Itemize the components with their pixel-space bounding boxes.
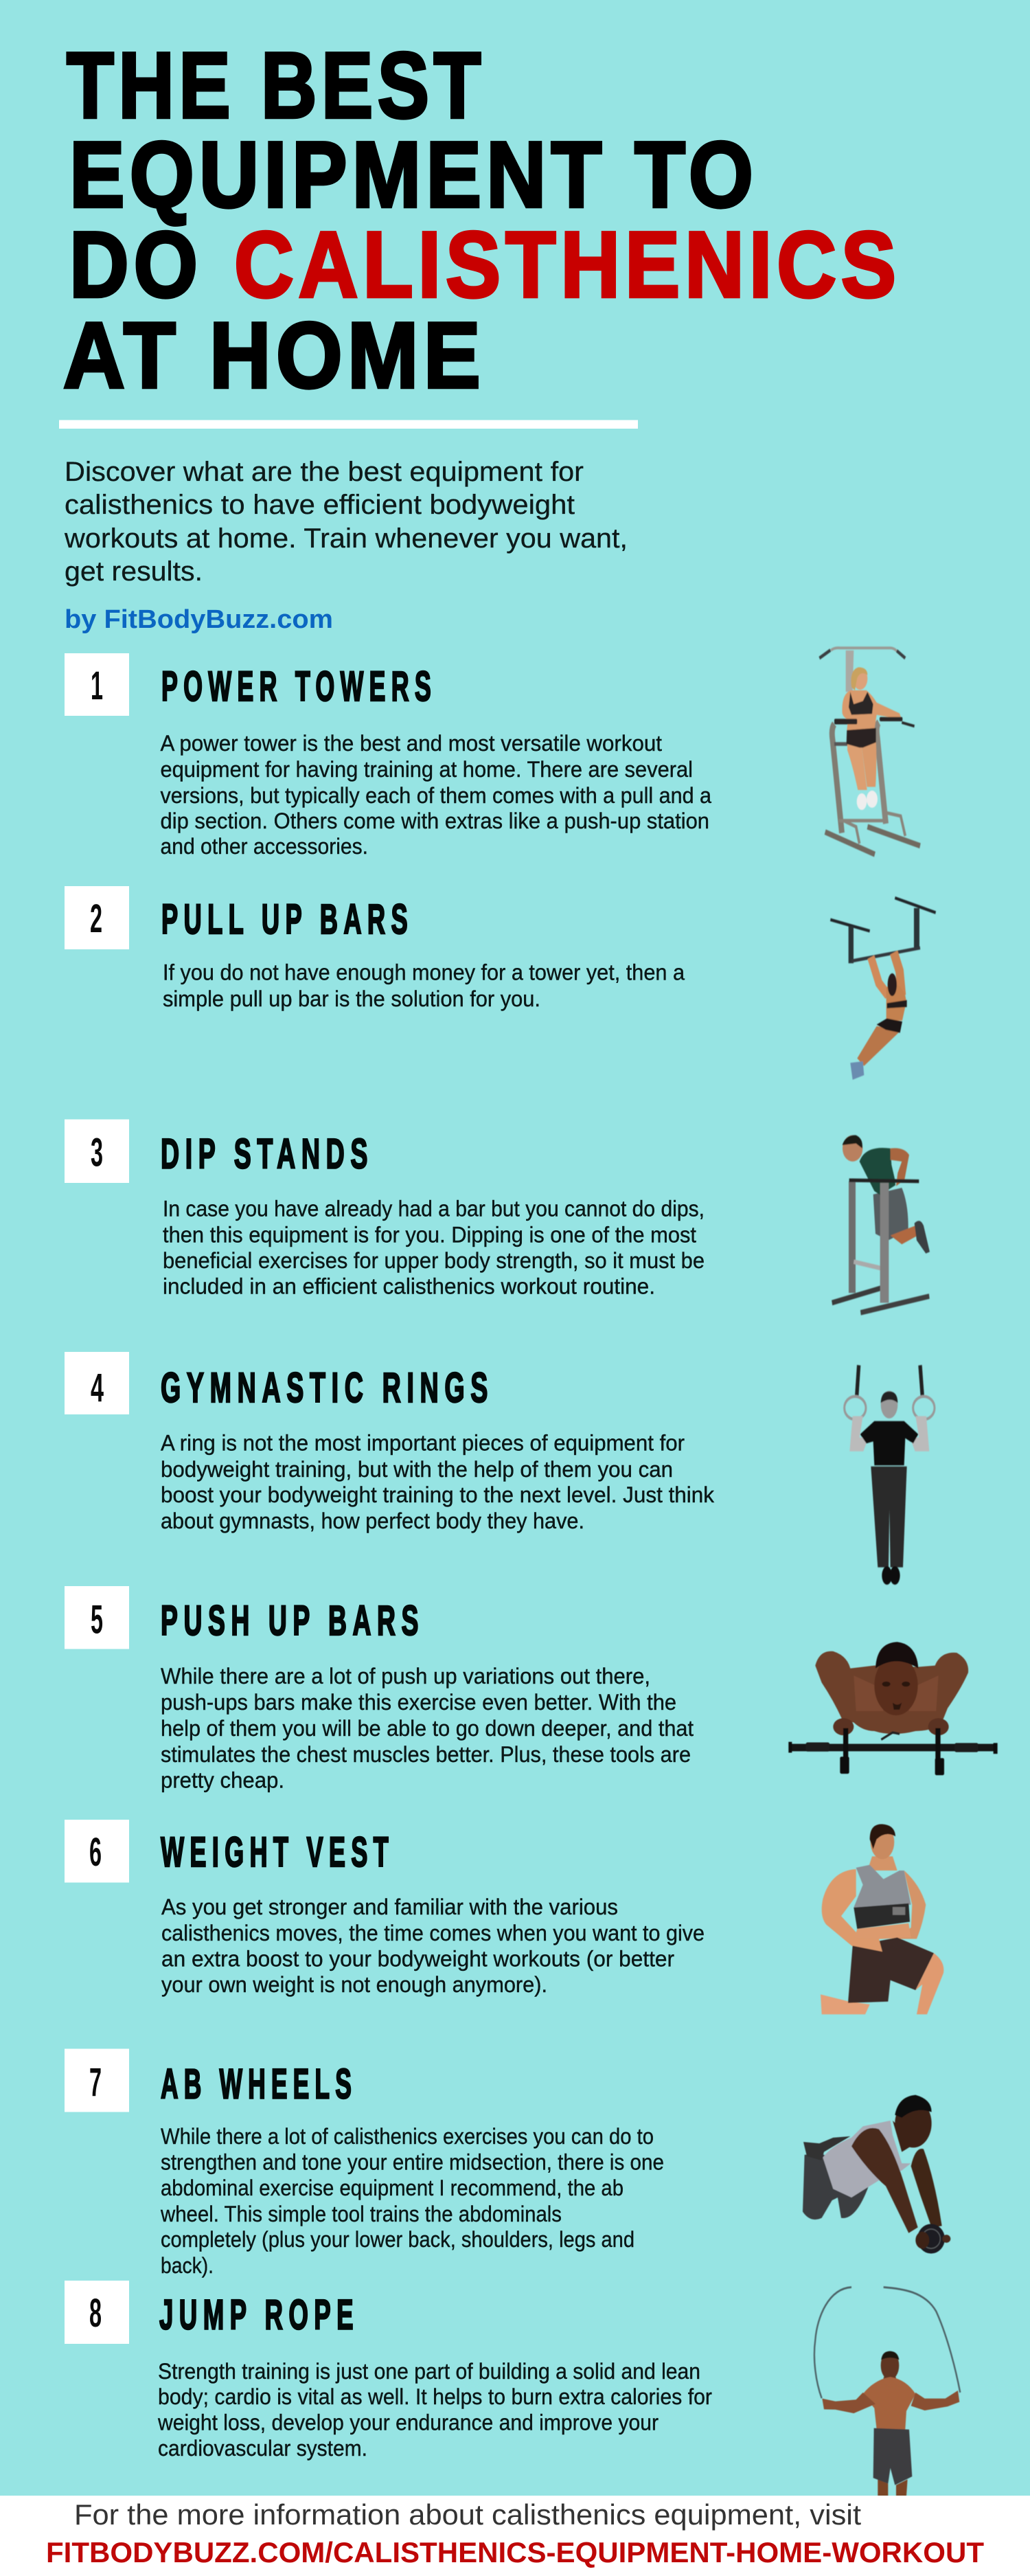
item 6: weight vest <box>65 1820 943 2014</box>
footer sentence: For the more information about calisthenics equipment, visit <box>74 2498 861 2531</box>
photo: woman on power tower <box>819 648 920 855</box>
item 5: push up bars <box>65 1586 998 1793</box>
description 7: completely (plus your lower back, shoulders, legs and <box>161 2227 634 2252</box>
heading: pull up bars: PULL UP BARS <box>161 896 413 942</box>
description 1: versions, but typically each of them comes with a pull and a <box>161 783 711 808</box>
number badge 7: 7 <box>89 2060 102 2105</box>
number badge 3 <box>65 1120 129 1183</box>
title: CALISTHENICS <box>234 212 901 317</box>
number badge 7 <box>65 2048 129 2112</box>
footer link: FITBODYBUZZ.COM/CALISTHENICS-EQUIPMENT-HOME-WORKOUT <box>46 2536 984 2568</box>
description 7 <box>160 2124 664 2278</box>
description 7: back). <box>161 2253 214 2278</box>
description 7: While there a lot of calisthenics exercises you can do to <box>161 2124 654 2149</box>
description 4: boost your bodyweight training to the next level. Just think <box>161 1482 715 1507</box>
description 3: then this equipment is for you. Dipping is one of the most <box>163 1223 696 1247</box>
description 4: bodyweight training, but with the help of them you can <box>161 1457 673 1482</box>
description 1: A power tower is the best and most versatile workout <box>161 731 662 756</box>
description 8: weight loss, develop your endurance and improve your <box>157 2410 659 2434</box>
description 7: abdominal exercise equipment I recommend, the ab <box>161 2176 623 2200</box>
description 7: strengthen and tone your entire midsection, there is one <box>161 2150 664 2175</box>
heading: dip stands: DIP STANDS <box>161 1131 374 1177</box>
heading: gymnastic rings: GYMNASTIC RINGS <box>161 1364 494 1411</box>
description 7: wheel. This simple tool trains the abdominals <box>160 2202 562 2226</box>
photo: man on gymnastic rings <box>845 1365 935 1585</box>
intro text: get results. <box>65 556 203 587</box>
description 6 <box>161 1895 705 1997</box>
number badge 1 <box>65 653 129 716</box>
description 1: dip section. Others come with extras like a push-up station <box>161 809 709 833</box>
item 8: jump rope <box>65 2281 960 2496</box>
intro text: Discover what are the best equipment for <box>65 457 584 487</box>
description 6: calisthenics moves, the time comes when you want to give <box>161 1921 705 1945</box>
number badge 8 <box>65 2281 129 2344</box>
item 1: power towers <box>65 648 920 859</box>
footer band <box>0 2496 1030 2576</box>
heading: push up bars: PUSH UP BARS <box>161 1597 424 1644</box>
heading: jump rope: JUMP ROPE <box>159 2292 359 2338</box>
description 3: included in an efficient calisthenics workout routine. <box>163 1274 655 1298</box>
description 6: As you get stronger and familiar with the various <box>161 1895 618 1919</box>
item 2: pull up bars <box>65 886 936 1080</box>
number badge 6 <box>65 1820 129 1882</box>
heading: power towers: POWER TOWERS <box>161 663 437 710</box>
item 3: dip stands <box>65 1120 930 1313</box>
byline: by FitBodyBuzz.com <box>65 605 333 634</box>
description 6: an extra boost to your bodyweight workouts (or better <box>161 1947 674 1971</box>
description 3 <box>163 1197 705 1298</box>
intro text: workouts at home. Train whenever you want, <box>64 523 628 554</box>
title <box>63 33 901 407</box>
title: EQUIPMENT TO <box>69 122 758 227</box>
description 3: In case you have already had a bar but you cannot do dips, <box>163 1197 705 1221</box>
description 4: about gymnasts, how perfect body they have. <box>161 1509 584 1533</box>
number badge 4: 4 <box>91 1366 104 1410</box>
heading: ab wheels: AB WHEELS <box>161 2061 357 2108</box>
description 5: push-ups bars make this exercise even better. With the <box>161 1690 676 1715</box>
number badge 5 <box>65 1586 129 1649</box>
photo: man using ab wheel <box>803 2095 950 2254</box>
description 3: beneficial exercises for upper body strength, so it must be <box>163 1248 705 1273</box>
number badge 8: 8 <box>89 2291 102 2336</box>
description 8: body; cardio is vital as well. It helps to burn extra calories for <box>158 2384 712 2409</box>
description 5: stimulates the chest muscles better. Plus, these tools are <box>161 1742 691 1767</box>
description 2: If you do not have enough money for a tower yet, then a <box>163 960 685 985</box>
photo: man on dip stand <box>832 1136 930 1313</box>
number badge 5: 5 <box>91 1598 103 1642</box>
number badge 6: 6 <box>89 1830 102 1875</box>
intro text: calisthenics to have efficient bodyweight <box>65 490 575 520</box>
intro text <box>64 457 628 587</box>
description 8: Strength training is just one part of building a solid and lean <box>158 2359 700 2384</box>
description 8 <box>157 2359 712 2461</box>
title underline rule <box>59 420 638 429</box>
photo: woman on pull up bar <box>830 898 936 1080</box>
number badge 4 <box>65 1352 129 1414</box>
description 1: and other accessories. <box>161 834 368 859</box>
title: AT HOME <box>63 303 485 407</box>
description 1 <box>161 731 711 859</box>
photo: man with jump rope <box>814 2287 960 2496</box>
description 5: While there are a lot of push up variations out there, <box>161 1664 650 1688</box>
number badge 2: 2 <box>90 896 102 941</box>
photo: man on push up bars <box>788 1642 998 1775</box>
description 5 <box>161 1664 694 1793</box>
number badge 2 <box>65 886 129 949</box>
description 5: help of them you will be able to go down deeper, and that <box>161 1716 694 1741</box>
description 4 <box>161 1430 715 1533</box>
description 6: your own weight is not enough anymore). <box>161 1972 547 1997</box>
description 5: pretty cheap. <box>161 1768 284 1793</box>
number badge 1: 1 <box>91 664 103 708</box>
number badge 3: 3 <box>91 1131 103 1175</box>
item 7: ab wheels <box>65 2048 950 2278</box>
item 4: gymnastic rings <box>65 1352 935 1585</box>
photo: man in weight vest <box>821 1824 943 2014</box>
title: THE BEST <box>67 33 485 137</box>
description 8: cardiovascular system. <box>158 2436 367 2461</box>
description 2: simple pull up bar is the solution for you. <box>163 986 540 1011</box>
description 4: A ring is not the most important pieces of equipment for <box>161 1430 685 1455</box>
description 2 <box>163 960 685 1011</box>
heading: weight vest: WEIGHT VEST <box>161 1829 394 1875</box>
title: DO <box>69 212 203 317</box>
description 1: equipment for having training at home. There are several <box>161 757 693 782</box>
